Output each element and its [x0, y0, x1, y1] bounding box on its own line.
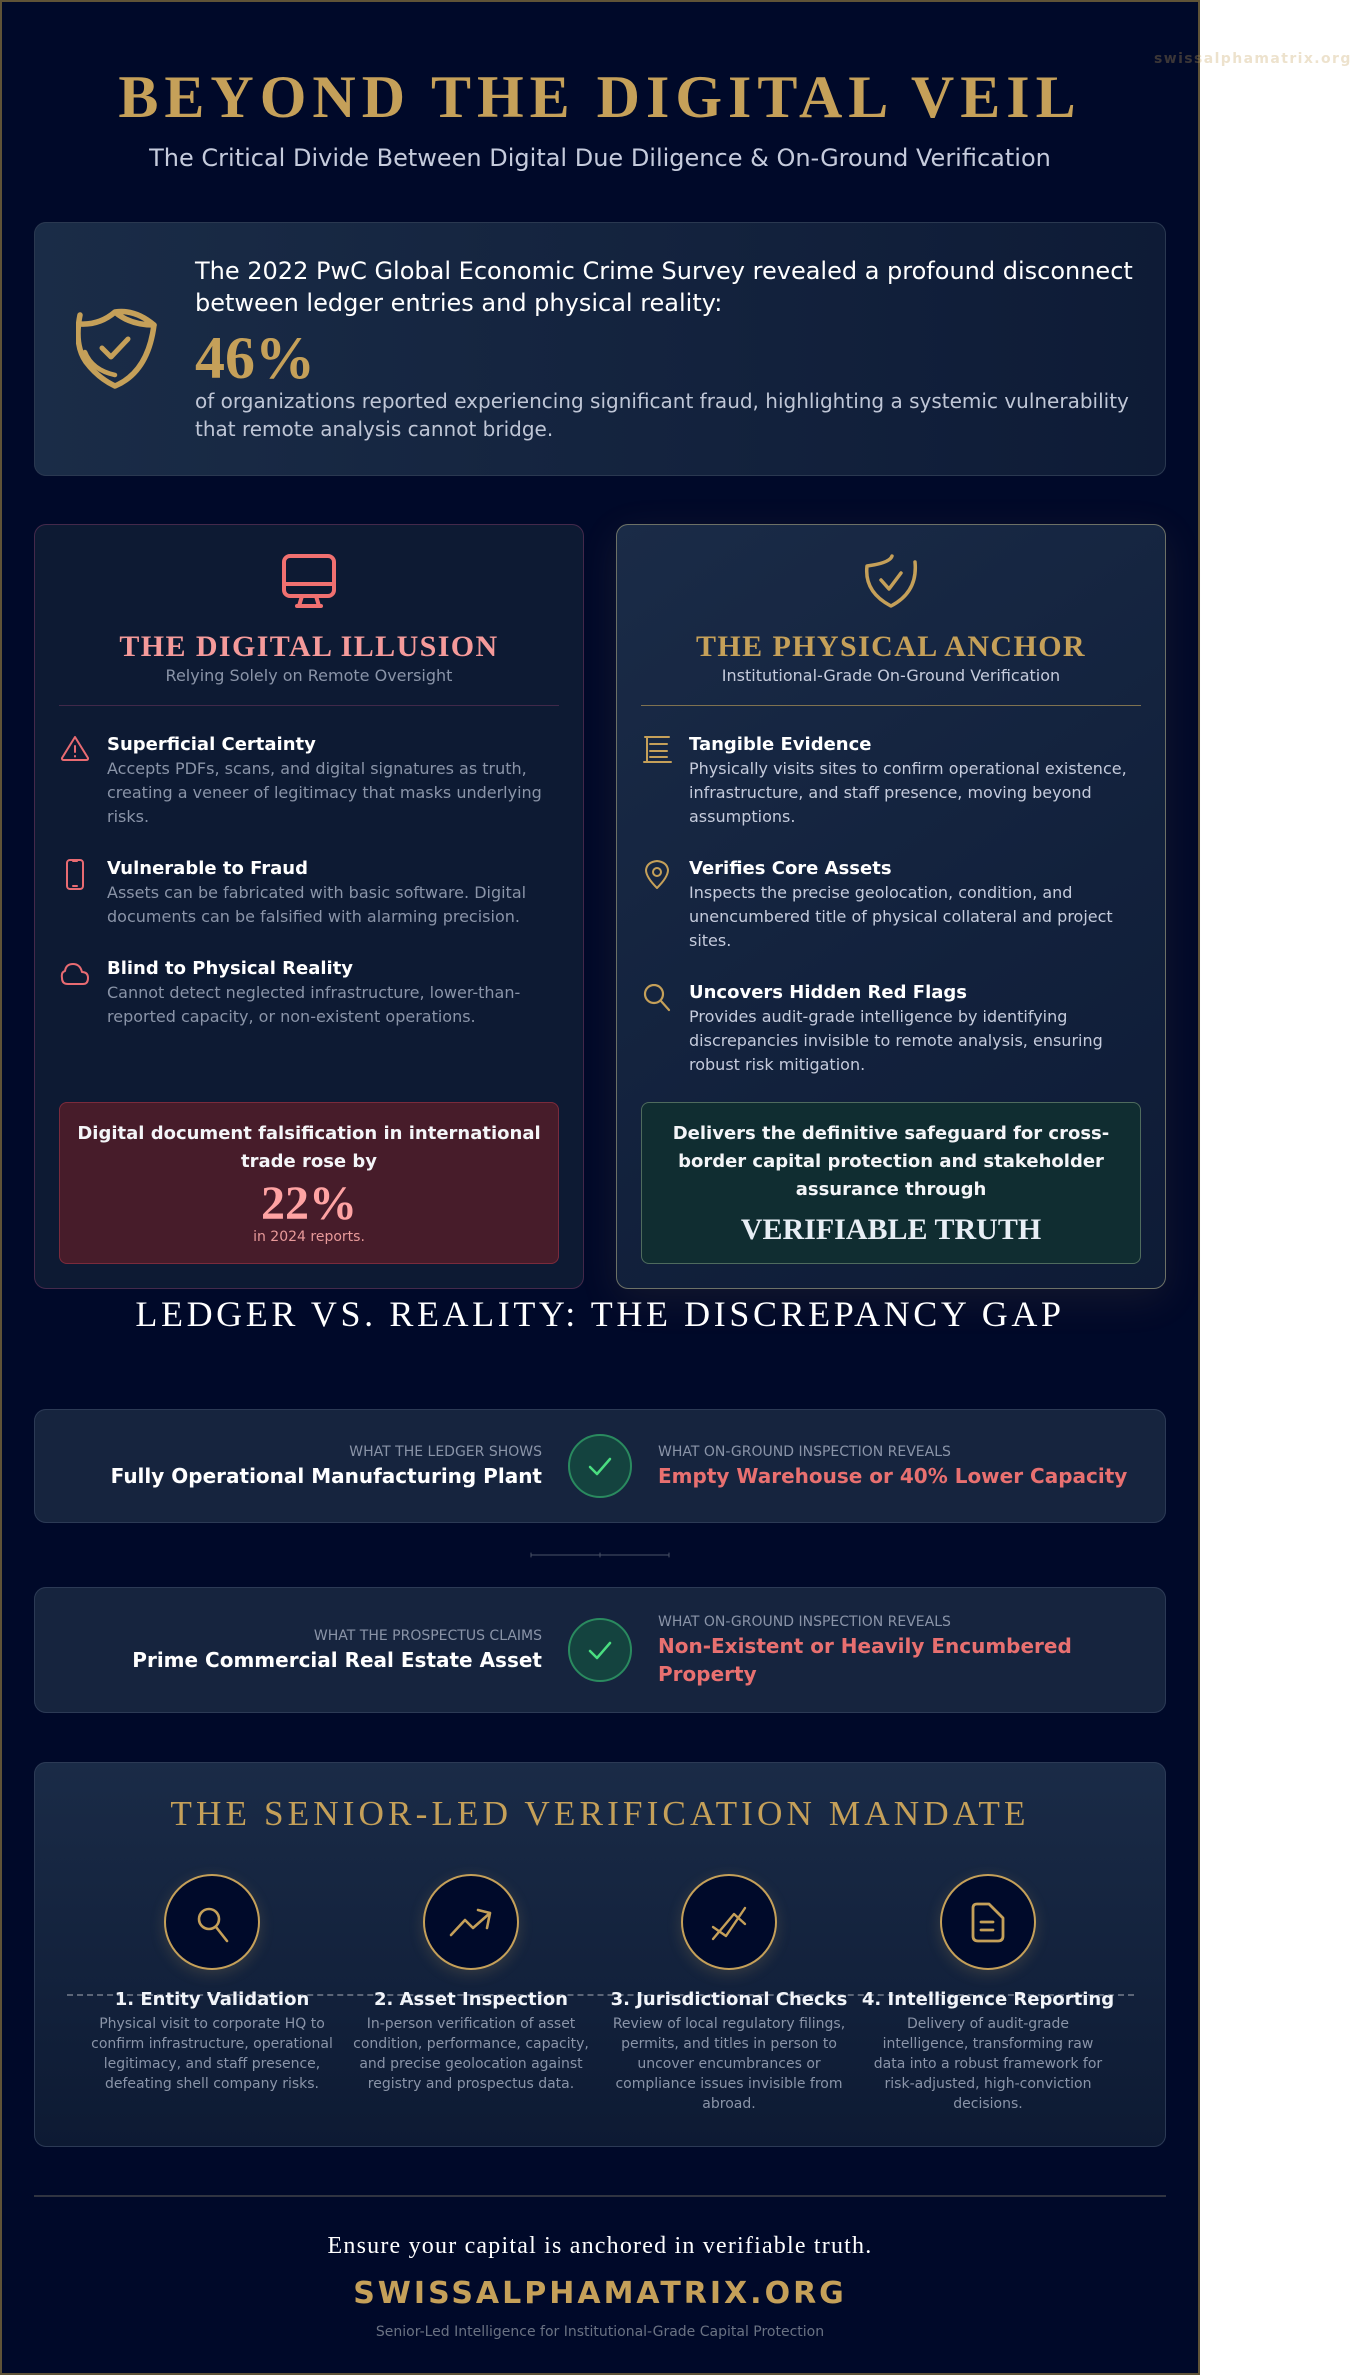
callout text: trade rose by	[241, 1151, 377, 1172]
statistic: 46%: 46%	[195, 325, 315, 391]
step description: Physical visit to corporate HQ to	[99, 2016, 325, 2032]
statistic: 22%: 22%	[261, 1177, 357, 1230]
footer note: Senior-Led Intelligence for Institutional-Grade Capital Protection	[376, 2324, 824, 2340]
description: robust risk mitigation.	[689, 1055, 865, 1074]
step title: 3. Jurisdictional Checks	[611, 1989, 847, 2010]
icon: magnifier	[644, 984, 670, 1012]
description	[689, 759, 1127, 826]
row: prospectus comparison	[34, 1587, 1166, 1713]
step description: Delivery of audit-grade	[907, 2016, 1069, 2032]
timeline dashed line	[67, 1994, 1134, 1996]
icon: cloud	[60, 963, 89, 985]
step description: legitimacy, and staff presence,	[104, 2056, 320, 2072]
text: Uncovers Hidden Red Flags	[689, 982, 967, 1003]
prospectus label: WHAT THE PROSPECTUS CLAIMS	[314, 1628, 542, 1644]
divider: row connector	[530, 1552, 670, 1558]
callout: verifiable truth	[641, 1102, 1141, 1264]
step description	[353, 2016, 589, 2092]
inspection value: Property	[658, 1662, 757, 1686]
icon: building	[643, 736, 672, 763]
text: Verifies Core Assets	[689, 858, 892, 879]
sub-heading: Relying Solely on Remote Oversight	[166, 666, 452, 685]
description: creating a veneer of legitimacy that masks underlying	[107, 783, 542, 802]
description	[689, 1007, 1103, 1074]
step description: risk-adjusted, high-conviction	[885, 2076, 1091, 2092]
divider	[59, 705, 559, 706]
icon: shield with check	[76, 308, 157, 389]
description: discrepancies invisible to remote analysis, ensuring	[689, 1031, 1103, 1050]
step description: intelligence, transforming raw	[883, 2036, 1093, 2052]
description	[107, 759, 542, 826]
description: Cannot detect neglected infrastructure, lower-than-	[107, 983, 520, 1002]
description: Inspects the precise geolocation, condition, and	[689, 883, 1072, 902]
callout text	[77, 1123, 541, 1172]
description	[107, 883, 526, 926]
callout text: assurance through	[796, 1179, 986, 1200]
step description: registry and prospectus data.	[368, 2076, 574, 2092]
text: Superficial Certainty	[107, 734, 316, 755]
step description: Review of local regulatory filings,	[613, 2016, 845, 2032]
icon: document	[940, 1874, 1036, 1970]
inspection value	[658, 1634, 1072, 1686]
item: blind to physical reality	[60, 958, 520, 1026]
inspection value: Non-Existent or Heavily Encumbered	[658, 1634, 1072, 1658]
text: Tangible Evidence	[689, 734, 872, 755]
step 2	[353, 1874, 589, 2092]
intro text: The 2022 PwC Global Economic Crime Survey revealed a profound disconnect	[195, 257, 1133, 285]
step description	[874, 2016, 1102, 2112]
prospectus value: Prime Commercial Real Estate Asset	[132, 1648, 542, 1672]
watermark: swissalphamatrix.org	[1154, 51, 1352, 67]
step 1	[91, 1874, 333, 2092]
icon: warning triangle	[61, 736, 89, 761]
step description: In-person verification of asset	[367, 2016, 575, 2032]
step description	[91, 2016, 333, 2092]
description: sites.	[689, 931, 731, 950]
callout: falsification statistic	[59, 1102, 559, 1264]
inspection value: Empty Warehouse or 40% Lower Capacity	[658, 1464, 1127, 1488]
step description: decisions.	[953, 2096, 1023, 2112]
step title: 1. Entity Validation	[115, 1989, 309, 2010]
step description: condition, performance, capacity,	[353, 2036, 589, 2052]
heading: THE DIGITAL ILLUSION	[119, 630, 499, 663]
statistic description	[195, 389, 1129, 441]
intro text: between ledger entries and physical reality:	[195, 289, 722, 317]
icon: check circle	[568, 1618, 632, 1682]
description: Assets can be fabricated with basic software. Digital	[107, 883, 526, 902]
verifiable truth: VERIFIABLE TRUTH	[741, 1213, 1041, 1246]
divider	[641, 705, 1141, 706]
icon: magnifier	[164, 1874, 260, 1970]
title: BEYOND THE DIGITAL VEIL	[118, 64, 1082, 130]
icon: monitor	[282, 554, 336, 608]
description	[107, 983, 520, 1026]
step title: 2. Asset Inspection	[374, 1989, 568, 2010]
panel: the digital illusion	[34, 524, 584, 1289]
description: Physically visits sites to confirm operational existence,	[689, 759, 1127, 778]
callout text: Digital document falsification in international	[77, 1123, 541, 1144]
text: Vulnerable to Fraud	[107, 858, 308, 879]
description: reported capacity, or non-existent operations.	[107, 1007, 476, 1026]
item: superficial certainty	[61, 734, 542, 826]
step description: uncover encumbrances or	[637, 2056, 821, 2072]
description: Accepts PDFs, scans, and digital signatures as truth,	[107, 759, 527, 778]
icon: shield check	[864, 554, 918, 608]
panel: survey statistic	[34, 222, 1166, 476]
description: documents can be falsified with alarming precision.	[107, 907, 520, 926]
callout text: Delivers the definitive safeguard for cross-	[673, 1123, 1109, 1144]
statistic description: that remote analysis cannot bridge.	[195, 417, 553, 441]
panel: senior-led verification mandate	[34, 1762, 1166, 2147]
description: infrastructure, and staff presence, moving beyond	[689, 783, 1092, 802]
footer divider	[34, 2195, 1166, 2197]
step 4	[862, 1874, 1114, 2112]
step description: defeating shell company risks.	[105, 2076, 319, 2092]
step description	[613, 2016, 845, 2112]
step description: data into a robust framework for	[874, 2056, 1102, 2072]
intro text	[194, 257, 1133, 317]
sub-heading: Institutional-Grade On-Ground Verification	[722, 666, 1060, 685]
icon: crossed zigzag	[681, 1874, 777, 1970]
statistic note: in 2024 reports.	[253, 1229, 365, 1245]
inspection label: WHAT ON-GROUND INSPECTION REVEALS	[658, 1614, 951, 1630]
step 3	[611, 1874, 847, 2112]
item: verifies core assets	[645, 858, 1113, 950]
step description: compliance issues invisible from	[615, 2076, 843, 2092]
step description: and precise geolocation against	[359, 2056, 583, 2072]
callout text: border capital protection and stakeholder	[678, 1151, 1104, 1172]
icon: phone	[66, 859, 84, 890]
description: Provides audit-grade intelligence by identifying	[689, 1007, 1067, 1026]
heading: ledger vs reality: LEDGER VS. REALITY: THE DISCREPANCY GAP	[135, 1294, 1065, 1334]
step description: confirm infrastructure, operational	[91, 2036, 333, 2052]
description: unencumbered title of physical collateral and project	[689, 907, 1113, 926]
description	[689, 883, 1113, 950]
item: tangible evidence	[643, 734, 1127, 826]
step title: 4. Intelligence Reporting	[862, 1989, 1114, 2010]
ledger label: WHAT THE LEDGER SHOWS	[349, 1444, 542, 1460]
item: uncovers hidden red flags	[644, 982, 1103, 1074]
item: vulnerable to fraud	[66, 858, 526, 926]
text: Blind to Physical Reality	[107, 958, 353, 979]
step description: abroad.	[702, 2096, 756, 2112]
row: ledger comparison	[34, 1409, 1166, 1523]
inspection label: WHAT ON-GROUND INSPECTION REVEALS	[658, 1444, 951, 1460]
description: risks.	[107, 807, 149, 826]
step description: permits, and titles in person to	[621, 2036, 837, 2052]
statistic description: of organizations reported experiencing significant fraud, highlighting a systemic vulnerability	[195, 389, 1129, 413]
icon: map pin	[645, 860, 669, 889]
panel: the physical anchor	[616, 524, 1166, 1289]
footer tagline: Ensure your capital is anchored in verifiable truth.	[328, 2233, 872, 2259]
footer brand: SWISSALPHAMATRIX.ORG	[353, 2276, 847, 2311]
icon: trending arrow	[423, 1874, 519, 1970]
heading: THE SENIOR-LED VERIFICATION MANDATE	[170, 1794, 1030, 1833]
description: assumptions.	[689, 807, 795, 826]
callout text	[673, 1123, 1109, 1200]
subtitle: The Critical Divide Between Digital Due Diligence & On-Ground Verification	[149, 144, 1051, 172]
ledger value: Fully Operational Manufacturing Plant	[111, 1464, 542, 1488]
heading: THE PHYSICAL ANCHOR	[696, 630, 1086, 663]
icon: check circle	[568, 1434, 632, 1498]
